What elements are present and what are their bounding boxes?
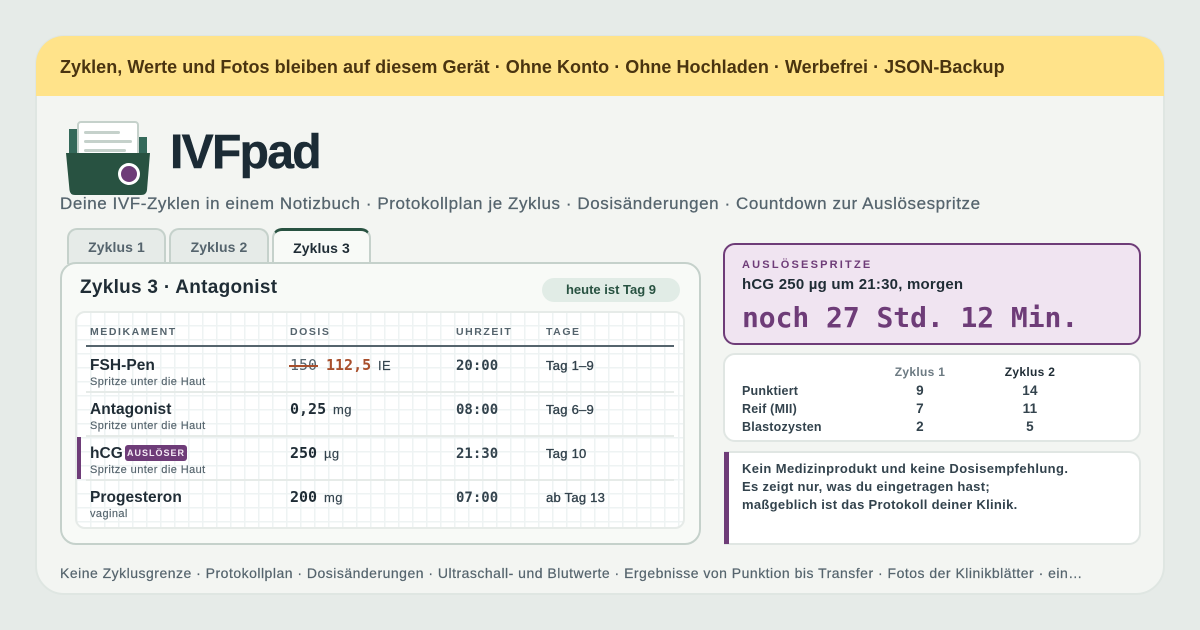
icon: folder with sheet and purple dot	[66, 121, 150, 195]
text: Punktiert	[742, 384, 798, 398]
text: 7	[916, 401, 924, 416]
text: vaginal	[90, 508, 128, 520]
text: 200	[290, 488, 317, 506]
row marker: trigger	[77, 437, 81, 479]
comparison header: Zyklus 2	[1005, 365, 1055, 379]
text: 07:00	[456, 490, 498, 506]
text: 08:00	[456, 402, 498, 418]
badge: today	[542, 278, 680, 302]
text: 2	[916, 419, 924, 434]
text: maßgeblich ist das Protokoll deiner Klinik.	[742, 497, 1018, 512]
table header: DOSIS	[290, 326, 330, 338]
text: Spritze unter die Haut	[90, 464, 206, 476]
subtitle: Deine IVF-Zyklen in einem Notizbuch · Protokollplan je Zyklus · Dosisänderungen · Countdown zur Auslösespritze	[60, 194, 981, 213]
table header: TAGE	[546, 326, 581, 338]
row: Antagonist	[90, 400, 594, 432]
text: mg	[333, 402, 352, 417]
text: Tag 6–9	[546, 402, 594, 417]
text: FSH-Pen	[90, 357, 155, 374]
text: Blastozysten	[742, 420, 822, 434]
text: 9	[916, 383, 924, 398]
text: 0,25	[290, 400, 326, 418]
text: 20:00	[456, 358, 498, 374]
panel: cycle plan	[60, 262, 701, 545]
tab: Zyklus 2	[169, 228, 269, 264]
countdown detail: hCG 250 µg um 21:30, morgen	[742, 276, 963, 293]
panel: cycle comparison	[723, 353, 1141, 442]
countdown label: AUSLÖSESPRITZE	[742, 259, 872, 271]
title: IVFpad	[170, 126, 320, 179]
text: Antagonist	[90, 401, 171, 418]
banner text: Zyklen, Werte und Fotos bleiben auf diesem Gerät · Ohne Konto · Ohne Hochladen · Werbefrei · JSON-Backup	[60, 57, 1005, 77]
text: 21:30	[456, 446, 498, 462]
text: µg	[324, 446, 340, 461]
text: 14	[1022, 383, 1038, 398]
tab: Zyklus 3 active	[272, 228, 371, 264]
text: IE	[378, 358, 391, 373]
footer feature list: Keine Zyklusgrenze · Protokollplan · Dosisänderungen · Ultraschall- und Blutwerte · Ergebnisse von Punktion bis Transfer · Fotos der Klinikblätter · ein…	[60, 565, 1083, 581]
comparison row: Reif	[742, 401, 1037, 416]
tab: Zyklus 3 active: Zyklus 3	[293, 240, 350, 256]
text: mg	[324, 490, 343, 505]
table header: MEDIKAMENT	[90, 326, 177, 338]
panel: trigger countdown	[723, 243, 1141, 345]
tab: Zyklus 1: Zyklus 1	[88, 239, 145, 255]
comparison header: Zyklus 1	[895, 365, 945, 379]
countdown value: noch 27 Std. 12 Min.	[742, 301, 1078, 334]
badge: trigger	[125, 445, 187, 461]
text: Tag 1–9	[546, 358, 594, 373]
text: Kein Medizinprodukt und keine Dosisempfehlung.	[742, 461, 1068, 476]
heading: cycle 3: Zyklus 3 · Antagonist	[80, 277, 277, 298]
text: 11	[1023, 401, 1037, 416]
text: 5	[1026, 419, 1034, 434]
text: 112,5	[326, 356, 371, 374]
tab: Zyklus 2: Zyklus 2	[191, 239, 247, 255]
text: Reif (MII)	[742, 402, 797, 416]
comparison row: Blastozysten	[742, 419, 1034, 434]
tab: Zyklus 1	[67, 228, 166, 264]
text: Es zeigt nur, was du eingetragen hast;	[742, 479, 990, 494]
text: 250	[290, 444, 317, 462]
badge: trigger: AUSLÖSER	[127, 448, 185, 458]
row: FSH-Pen	[90, 356, 594, 388]
panel: disclaimer	[724, 451, 1141, 545]
row: hCG	[90, 444, 587, 476]
table header: UHRZEIT	[456, 326, 512, 338]
text: Spritze unter die Haut	[90, 376, 206, 388]
row: Progesteron	[90, 488, 605, 520]
text: Spritze unter die Haut	[90, 420, 206, 432]
disclaimer text	[742, 461, 1068, 512]
text: hCG	[90, 445, 123, 462]
text: 150	[290, 356, 317, 374]
text: ab Tag 13	[546, 490, 605, 505]
privacy banner	[36, 36, 1164, 96]
comparison row: Punktiert	[742, 383, 1038, 398]
notebook table	[75, 311, 685, 529]
disclaimer accent bar	[724, 452, 729, 544]
badge: today: heute ist Tag 9	[566, 282, 656, 297]
text: Tag 10	[546, 446, 587, 461]
text: Progesteron	[90, 489, 182, 506]
